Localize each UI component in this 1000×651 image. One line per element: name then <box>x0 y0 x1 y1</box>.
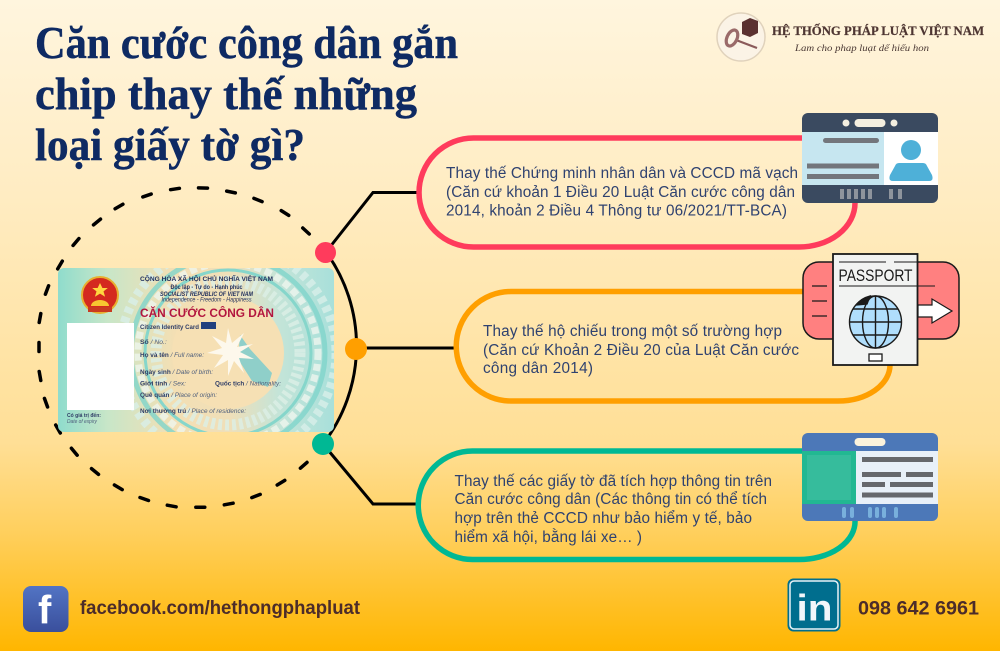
node: green <box>312 433 334 455</box>
text: orange block: (Căn cứ Khoản 2 Điều 20 của Luật Căn cước <box>483 342 799 359</box>
icon: facebook: f <box>38 588 52 632</box>
pill: green <box>418 451 855 560</box>
card fields: Citizen Identity Card <box>140 324 199 331</box>
card fields: Có giá trị đến: <box>67 412 101 419</box>
card header: CỘNG HÒA XÃ HỘI CHỦ NGHĨA VIỆT NAM <box>140 274 273 283</box>
icon: passport <box>803 254 959 365</box>
facebook link: facebook.com/hethongphapluat <box>80 598 361 619</box>
text: green block: hợp trên thẻ CCCD như bảo hiểm y tế, bảo <box>454 510 752 527</box>
text: red block: 2014, khoản 2 Điều 4 Thông tư 06/2021/TT-BCA) <box>446 202 787 220</box>
connector lines <box>323 192 456 504</box>
icon: linkedin <box>788 578 840 632</box>
text: red block: Thay thế Chứng minh nhân dân và CCCD mã vạch <box>446 165 798 182</box>
card fields: Quốc tịch / Nationality: <box>215 380 281 388</box>
card fields: Số / No.: <box>140 338 167 346</box>
card fields: Giới tính / Sex: <box>140 380 186 388</box>
phone number: 098 642 6961 <box>858 598 979 620</box>
card fields: Quê quán / Place of origin: <box>140 392 217 399</box>
connector arc <box>323 252 357 444</box>
text: orange block: công dân 2014) <box>483 360 593 377</box>
card header: Independence - Freedom - Happiness <box>162 296 252 304</box>
card fields: Nơi thường trú / Place of residence: <box>140 408 246 415</box>
icon: info card <box>802 433 938 521</box>
dashed circle <box>39 188 309 507</box>
card fields <box>67 322 281 425</box>
card header: Độc lập - Tự do - Hạnh phúc <box>170 284 243 291</box>
title: loại giấy tờ gì? <box>35 119 305 170</box>
card fields: Date of expiry <box>67 419 97 425</box>
logo: Hệ thống Pháp luật Việt Nam <box>717 13 985 61</box>
icon: facebook <box>23 586 68 632</box>
card header: SOCIALIST REPUBLIC OF VIET NAM <box>160 291 254 298</box>
text: red block: (Căn cứ khoản 1 Điều 20 Luật Căn cước công dân <box>446 184 795 201</box>
card title: CĂN CƯỚC CÔNG DÂN <box>140 307 274 320</box>
icon: gavel seal <box>717 13 765 61</box>
icon: ID card <box>802 113 938 203</box>
pill: red <box>419 138 855 247</box>
title: Căn cước công dân gắn <box>35 17 458 68</box>
card photo placeholder <box>67 323 134 410</box>
text: green block <box>454 473 772 546</box>
passport label: PASSPORT <box>838 267 912 285</box>
node: orange <box>345 338 367 360</box>
text: orange block <box>483 323 799 377</box>
card fields: Ngày sinh / Date of birth: <box>140 369 213 376</box>
text: green block: Căn cước công dân (Các thông tin có thể tích <box>454 491 767 508</box>
text: red block <box>446 165 798 220</box>
card header <box>140 274 273 304</box>
logo name: HỆ THỐNG PHÁP LUẬT VIỆT NAM <box>772 23 985 38</box>
title <box>35 17 458 170</box>
text: green block: Thay thế các giấy tờ đã tích hợp thông tin trên <box>454 473 772 490</box>
card fields: Họ và tên / Full name: <box>140 352 204 359</box>
pill: orange <box>456 292 890 401</box>
card emblem <box>82 277 118 313</box>
title: chip thay thế những <box>35 68 417 119</box>
logo tagline: Lam cho phap luạt dể hiểu hon <box>794 43 929 54</box>
text: green block: hiểm xã hội, bằng lái xe… ) <box>454 529 642 546</box>
node: red <box>315 242 336 263</box>
globe <box>850 296 902 348</box>
icon: linkedin: in <box>796 588 832 628</box>
ID card image <box>58 268 334 432</box>
text: orange block: Thay thế hộ chiếu trong một số trường hợp <box>483 323 782 340</box>
